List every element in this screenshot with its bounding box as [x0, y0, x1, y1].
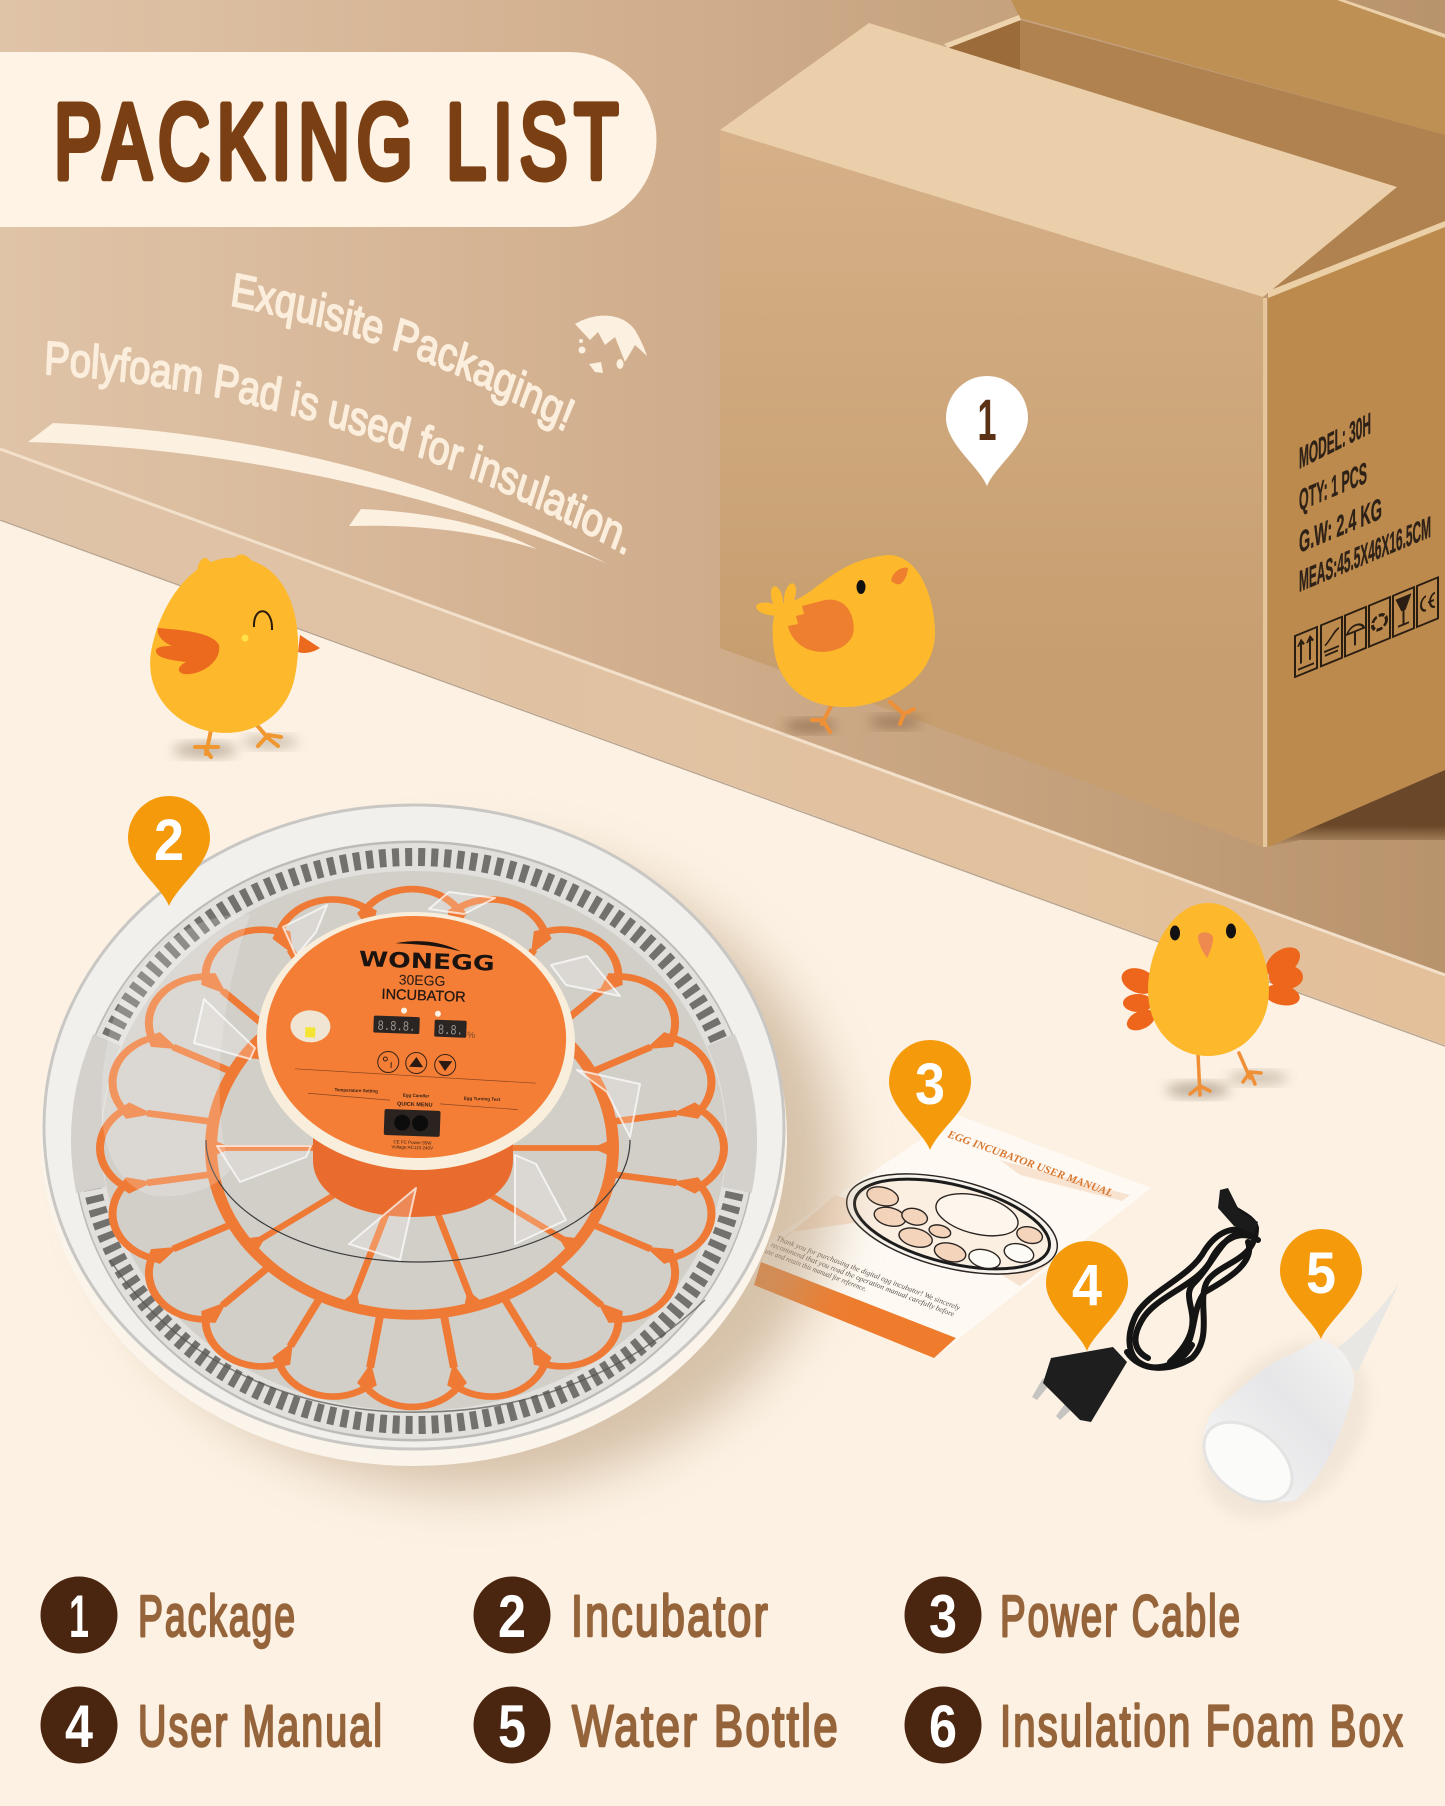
package box [720, 0, 1445, 847]
legend item 2: 2 [498, 1583, 526, 1650]
box right face [1268, 226, 1445, 847]
buttons [377, 1051, 456, 1076]
power socket [384, 1109, 441, 1137]
title pill [0, 52, 656, 227]
chick: left [137, 544, 320, 757]
pin 1 [946, 376, 1028, 486]
plug prongs [1032, 1378, 1050, 1400]
legend item 5: 5 [498, 1693, 526, 1760]
control panel [253, 907, 579, 1175]
control panel: 8.8.8. [377, 1019, 416, 1036]
legend item 6: 6 [929, 1693, 957, 1760]
egg turner paddles [194, 892, 640, 1260]
quick menu: Egg Turning Test [464, 1096, 501, 1102]
pin 1: 1 [978, 388, 996, 453]
box lid flap [720, 23, 1397, 297]
displays [373, 1016, 420, 1034]
egg rack [93, 883, 731, 1413]
lid highlight [101, 915, 250, 1196]
box back flap [1011, 0, 1445, 135]
pin 5 [1280, 1229, 1362, 1339]
legend item 3: Power Cable [1000, 1584, 1242, 1649]
swoosh decoration [28, 423, 606, 563]
legend item 1: 1 [69, 1583, 89, 1650]
lid edge line [110, 1260, 705, 1412]
shadow under box [1268, 770, 1445, 847]
quick menu: Egg Candler [403, 1093, 430, 1099]
control panel: Voltage:AC110-240V [391, 1144, 433, 1151]
user manual [754, 1115, 1151, 1358]
manual paragraph: recommend that you read the operation manual carefully before [770, 1240, 956, 1319]
model name: 30EGG [399, 971, 446, 989]
box handling icons [1295, 577, 1438, 677]
box interior [947, 20, 1445, 295]
legend item 4: User Manual [138, 1694, 384, 1759]
pin 3: 3 [915, 1052, 945, 1117]
control panel: 8.8. [438, 1023, 463, 1040]
manual title: EGG INCUBATOR USER MANUAL [945, 1128, 1115, 1200]
pin 4: 4 [1072, 1253, 1102, 1318]
quick menu: QUICK MENU [397, 1101, 433, 1109]
legend item 5: Water Bottle [572, 1694, 840, 1759]
legend item 2: Incubator [571, 1584, 770, 1649]
clear disc edge [206, 1140, 630, 1262]
pin 5: 5 [1306, 1241, 1336, 1306]
chick: on box [755, 555, 935, 732]
water bottle [1167, 1283, 1403, 1552]
plug body [1043, 1347, 1127, 1422]
legend item 2 [474, 1576, 770, 1654]
legend item 6 [904, 1686, 1405, 1764]
manual line drawing [837, 1155, 1067, 1293]
title: PACKING LIST [54, 83, 625, 201]
back wall [0, 0, 1445, 975]
tagline text: Exquisite Packaging! [232, 272, 576, 432]
cable connector [1218, 1188, 1258, 1234]
brand logo: WONEGG [358, 947, 495, 976]
incubator shadow [100, 850, 840, 1490]
vent ring [88, 857, 740, 1425]
base shell [41, 810, 787, 1466]
control panel: INCUBATOR [381, 987, 466, 1006]
power cable [1032, 1188, 1258, 1422]
chick: right [1118, 903, 1305, 1097]
control panel: CE FC Power:35W [393, 1139, 432, 1146]
manual paragraph: use and retain this manual for reference. [764, 1246, 868, 1293]
quick menu [294, 1069, 536, 1112]
tagline text: Polyfoam Pad is used for insulation. [46, 340, 626, 555]
lamp [290, 1010, 331, 1043]
legend item 1 [40, 1576, 297, 1654]
icon: cracked egg shell [575, 316, 647, 373]
legend item 3 [904, 1576, 1242, 1654]
quick menu: Temperature Setting [334, 1087, 378, 1094]
ledge band [0, 449, 1445, 1046]
legend item 3: 3 [929, 1583, 957, 1650]
manual paragraph: Thank you for purchasing the digital egg incubator! We sincerely [775, 1233, 962, 1312]
legend item 4: 4 [65, 1693, 94, 1760]
legend item 5 [474, 1686, 840, 1764]
pin 2 [128, 796, 210, 906]
pin 3 [889, 1040, 971, 1150]
inner tray [74, 842, 754, 1440]
pin 4 [1046, 1241, 1128, 1351]
legend item 1: Package [138, 1584, 297, 1649]
pin 2: 2 [154, 808, 184, 873]
central column [313, 1090, 513, 1217]
box front face [720, 130, 1263, 847]
legend [40, 1576, 1405, 1764]
incubator [41, 805, 787, 1466]
control panel: % [467, 1030, 475, 1040]
legend item 4 [40, 1686, 384, 1764]
